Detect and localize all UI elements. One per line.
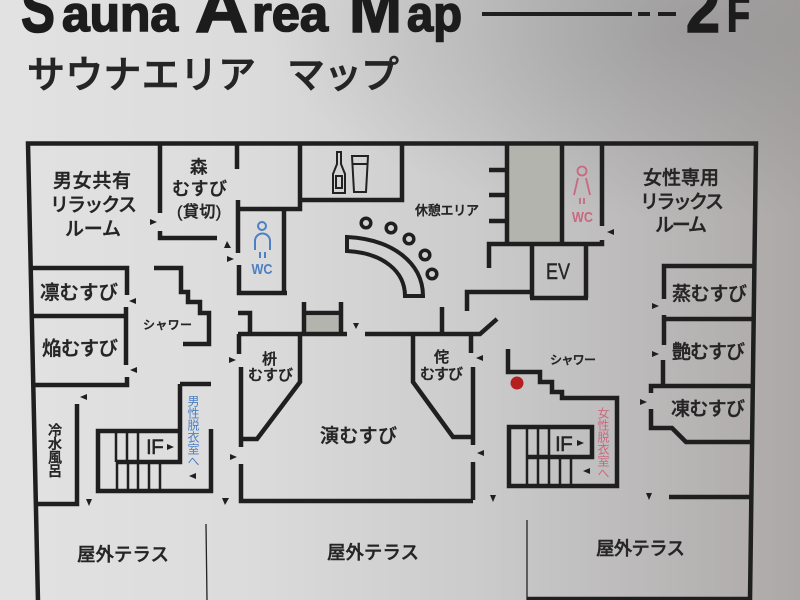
floor indicator line [482,12,676,16]
label: women's relax room [640,167,724,236]
label: Jo Musubi: 蒸むすび [672,283,747,305]
label: En Musubi (lustre): 艶むすび [672,341,745,363]
terrace dividers [206,520,527,600]
label: stairs 1F women's side: IF [555,433,573,456]
label: shared relax room: 男女共有 [53,170,131,192]
label: Masu Musubi: 枡 [262,351,277,368]
label: women's relax room: リラックス [640,191,724,213]
bottom terrace wall [527,597,752,600]
outer walls [28,144,756,600]
label: cold bath: 冷水風呂 [47,423,63,478]
label: terrace left: 屋外テラス [77,544,169,565]
subtitle: サウナエリア [27,55,256,97]
icon: men's WC [252,222,273,278]
label: To Musubi: 凍むすび [671,398,745,420]
title: Sauna Area Map [21,0,462,47]
door arrows [80,219,659,506]
label: En Musubi (performance): 演むすび [320,425,397,447]
label: shared relax room [50,170,137,240]
label: Mori Musubi [172,157,227,221]
room labels [40,157,747,565]
icon: bottle and beer glass [333,152,368,193]
label: Wabi Musubi [420,349,463,383]
label: Mori Musubi: 森 [190,157,208,177]
icon: women's WC: WC [572,209,593,226]
label: Rin Musubi: 凛むすび [40,282,118,304]
label: shared relax room: リラックス [50,194,137,216]
icon: men's WC: WC [252,261,273,278]
label: Wabi Musubi: 侘 [434,349,449,366]
gray service areas [306,146,561,332]
label: terrace right: 屋外テラス [596,538,685,559]
subtitle [27,55,399,97]
label: men's shower: シャワー [143,318,192,332]
panel: floor plan walls [28,143,756,600]
label: women's shower: シャワー [550,353,596,367]
label: EV: EV [546,259,570,284]
stair treads [116,427,571,491]
label: women's relax room: ルーム [655,215,707,236]
label: Mori Musubi: (貸切) [177,203,222,221]
icon: women's WC [572,166,593,226]
lounge counter [347,237,423,296]
floor label: 2F [686,0,750,47]
label: Mori Musubi: むすび [172,179,227,199]
label: lounge area: 休憩エリア [415,203,479,218]
label: Wabi Musubi: むすび [420,366,463,383]
lounge stools [361,218,437,279]
label: shared relax room: ルーム [65,219,121,240]
interior walls [32,143,755,504]
label: to women's changing room: 女性脱衣室へ [596,407,610,479]
label: women's relax room: 女性専用 [643,167,719,189]
label: terrace centre: 屋外テラス [327,542,419,563]
label: En Musubi (flame): 焔むすび [42,338,118,360]
label: stairs 1F men's side: IF [146,436,164,459]
label: to men's changing room: 男性脱衣室へ [186,395,200,467]
label: Masu Musubi: むすび [248,367,293,384]
subtitle: マップ [287,55,399,97]
label: Masu Musubi [248,351,293,384]
red marker [510,376,524,390]
